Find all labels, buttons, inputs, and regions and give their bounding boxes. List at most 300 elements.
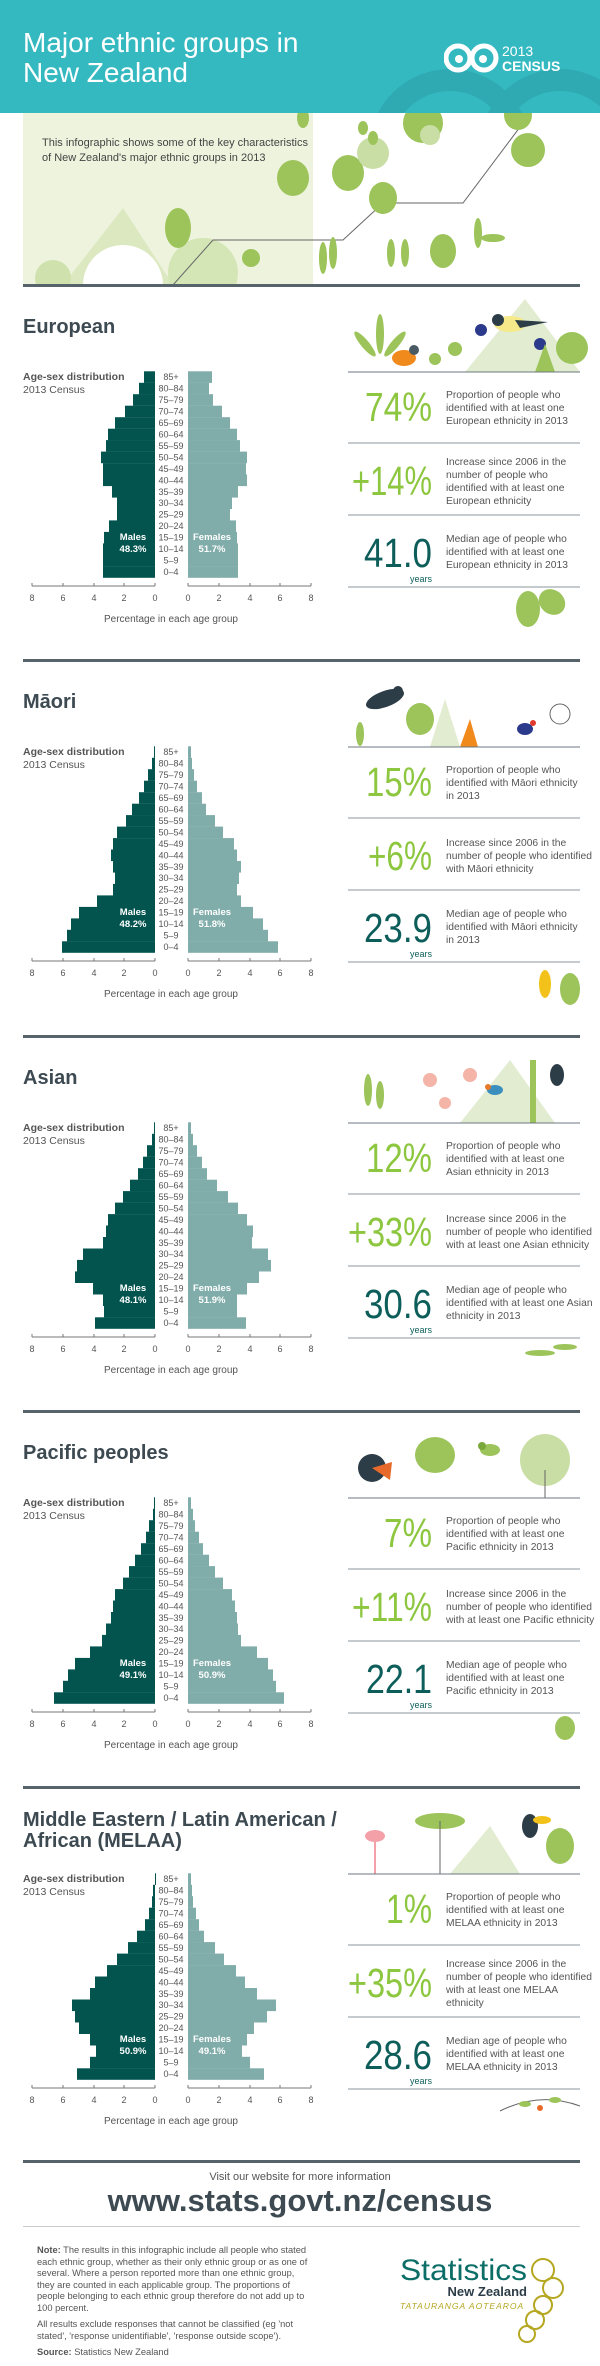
stat: proportion: Proportion of people who <box>446 390 561 401</box>
population pyramid: 80–84 <box>158 758 184 768</box>
chart label <box>23 1497 125 1522</box>
logo: 2013 census: CENSUS <box>502 58 560 74</box>
stat: median age: years <box>410 1700 432 1710</box>
population pyramid: 5–9 <box>163 1307 179 1317</box>
logo: 2013 census: 2013 <box>502 43 533 59</box>
population pyramid: 55–59 <box>158 1567 184 1577</box>
population pyramid: 60–64 <box>158 1555 184 1565</box>
population pyramid: 80–84 <box>158 1886 184 1896</box>
stat: increase: with at least one Asian ethnicity <box>445 1240 590 1251</box>
chart label <box>23 1873 125 1898</box>
population pyramid: 4 <box>91 1719 97 1729</box>
population pyramid: 75–79 <box>158 395 184 405</box>
population pyramid: 65–69 <box>158 418 184 428</box>
population pyramid: 2 <box>216 593 222 603</box>
population pyramid: 50–54 <box>158 452 184 462</box>
stat: median age: Median age of people who <box>446 2036 567 2047</box>
population pyramid: 70–74 <box>158 782 184 792</box>
stat: proportion: identified with at least one <box>446 403 565 414</box>
stat: increase: number of people who identified <box>446 1602 592 1613</box>
population pyramid: 85+ <box>163 1874 179 1884</box>
population pyramid: 75–79 <box>158 770 184 780</box>
stat: increase: +6% <box>368 833 432 879</box>
population pyramid: 45–49 <box>158 839 184 849</box>
population pyramid: 50–54 <box>158 1954 184 1964</box>
stat: proportion: 1% <box>386 1886 432 1932</box>
population pyramid: 49.1% <box>199 2046 226 2057</box>
stat: increase: European ethnicity <box>446 496 532 507</box>
stat: median age: years <box>410 949 432 959</box>
population pyramid: 2 <box>121 968 127 978</box>
population pyramid: 15–19 <box>158 533 184 543</box>
population pyramid: 5–9 <box>163 931 179 941</box>
illustration: vine <box>500 2097 580 2111</box>
stat: increase <box>352 1584 595 1630</box>
population pyramid: 80–84 <box>158 1134 184 1144</box>
population pyramid: 2 <box>216 1344 222 1354</box>
stat: median age: ethnicity in 2013 <box>446 1311 521 1322</box>
population pyramid <box>29 746 314 1000</box>
section: Pacific peoples <box>23 1410 595 1751</box>
stat: proportion: identified with at least one <box>446 1905 565 1916</box>
population pyramid: 48.1% <box>120 1295 147 1306</box>
stat: increase: Increase since 2006 in the <box>446 1589 566 1600</box>
population pyramid: 6 <box>277 1719 283 1729</box>
illustration: grass <box>525 1344 577 1356</box>
population pyramid: 45–49 <box>158 1966 184 1976</box>
logo: Statistics New Zealand <box>400 2254 564 2343</box>
population pyramid: 10–14 <box>158 1295 184 1305</box>
population pyramid: 15–19 <box>158 908 184 918</box>
heading: European <box>23 316 115 338</box>
population pyramid: 0 <box>185 593 191 603</box>
stat: median age: Median age of people who <box>446 1285 567 1296</box>
population pyramid: Males <box>120 907 146 918</box>
population pyramid: 0 <box>152 593 158 603</box>
population pyramid: 80–84 <box>158 384 184 394</box>
stat: median age: years <box>410 1325 432 1335</box>
stat: median age: MELAA ethnicity in 2013 <box>446 2062 558 2073</box>
population pyramid: 60–64 <box>158 1931 184 1941</box>
population pyramid: 50–54 <box>158 1578 184 1588</box>
population pyramid: 40–44 <box>158 1601 184 1611</box>
population pyramid: 0 <box>152 1719 158 1729</box>
population pyramid: 25–29 <box>158 510 184 520</box>
population pyramid: 10–14 <box>158 1670 184 1680</box>
stat: proportion <box>366 1135 565 1181</box>
population pyramid: 50.9% <box>199 1670 226 1681</box>
population pyramid: 0 <box>185 1344 191 1354</box>
population pyramid: 51.9% <box>199 1295 226 1306</box>
population pyramid: 40–44 <box>158 1226 184 1236</box>
section: Asian <box>23 1035 593 1376</box>
stat: increase: number of people who identified <box>446 1227 592 1238</box>
population pyramid: 15–19 <box>158 1284 184 1294</box>
population pyramid: 20–24 <box>158 896 184 906</box>
stat: median age: European ethnicity in 2013 <box>446 560 568 571</box>
population pyramid: 2 <box>216 1719 222 1729</box>
chart label: 2013 Census <box>23 1510 85 1522</box>
chart label: Age-sex distribution <box>23 371 125 383</box>
population pyramid: 50–54 <box>158 1203 184 1213</box>
population pyramid: 25–29 <box>158 885 184 895</box>
title <box>23 27 298 88</box>
population pyramid: 4 <box>247 2095 253 2105</box>
stat: proportion: Asian ethnicity in 2013 <box>446 1167 549 1178</box>
population pyramid: 0–4 <box>163 1693 179 1703</box>
population pyramid: 55–59 <box>158 1192 184 1202</box>
population pyramid: 0–4 <box>163 1318 179 1328</box>
population pyramid: 4 <box>247 968 253 978</box>
population pyramid: 6 <box>277 1344 283 1354</box>
stat: increase: +35% <box>348 1960 432 2006</box>
stat: increase <box>368 833 592 879</box>
population pyramid: 40–44 <box>158 475 184 485</box>
stat: median age: 28.6 <box>364 2032 432 2078</box>
population pyramid: 50–54 <box>158 827 184 837</box>
heading <box>23 1809 337 1852</box>
population pyramid: 60–64 <box>158 1180 184 1190</box>
stat: increase: Increase since 2006 in the <box>446 838 566 849</box>
population pyramid: 10–14 <box>158 544 184 554</box>
illustration: birds and plants <box>348 299 588 372</box>
section: European <box>23 284 588 627</box>
population pyramid: Males <box>120 2034 146 2045</box>
population pyramid: 75–79 <box>158 1897 184 1907</box>
illustration: leaves <box>539 970 580 1005</box>
population pyramid: 0–4 <box>163 2069 179 2079</box>
stat: increase: ethnicity <box>446 1998 485 2009</box>
heading: African (MELAA) <box>23 1830 182 1852</box>
stat: median age: identified with Māori ethnicity <box>446 922 578 933</box>
population pyramid: 60–64 <box>158 429 184 439</box>
population pyramid: 4 <box>91 593 97 603</box>
population pyramid: Females <box>193 2034 231 2045</box>
population pyramid: 20–24 <box>158 1647 184 1657</box>
population pyramid: 45–49 <box>158 1215 184 1225</box>
population pyramid: 25–29 <box>158 1636 184 1646</box>
population pyramid: Percentage in each age group <box>104 1740 238 1751</box>
stat: proportion: Pacific ethnicity in 2013 <box>446 1542 554 1553</box>
footer: notes: Note: The results in this infographic include all people who stated each ethnic group, whether as their only ethnic group or as one of several. Where a person reported more than one ethnic group, they are counted in each applicable group. The proportions of people belonging to each ethnic group therefore do not add up to 100 percent. <box>37 2245 307 2312</box>
population pyramid: Females <box>193 532 231 543</box>
population pyramid: 50.9% <box>120 2046 147 2057</box>
population pyramid <box>29 371 314 625</box>
population pyramid: 25–29 <box>158 1261 184 1271</box>
population pyramid: 0 <box>185 968 191 978</box>
footer: notes <box>37 2245 308 2357</box>
population pyramid: 35–39 <box>158 1613 184 1623</box>
stat: proportion: identified with Māori ethnicity <box>446 778 578 789</box>
population pyramid: 55–59 <box>158 441 184 451</box>
population pyramid: 0 <box>185 2095 191 2105</box>
logo: Statistics New Zealand: New Zealand <box>448 2284 527 2299</box>
stat: median age <box>366 1656 567 1710</box>
header banner <box>0 0 600 113</box>
population pyramid <box>29 1122 314 1376</box>
stat: median age <box>364 1281 593 1335</box>
stat: proportion: Proportion of people who <box>446 1141 561 1152</box>
illustration: birds and trees <box>348 1434 580 1498</box>
stat: increase: Increase since 2006 in the <box>446 1959 566 1970</box>
population pyramid: 0 <box>152 968 158 978</box>
population pyramid <box>29 1873 314 2127</box>
population pyramid: 55–59 <box>158 1943 184 1953</box>
population pyramid <box>29 1497 314 1751</box>
chart label: 2013 Census <box>23 759 85 771</box>
population pyramid: 4 <box>91 2095 97 2105</box>
stat: increase: Increase since 2006 in the <box>446 457 566 468</box>
population pyramid: 30–34 <box>158 873 184 883</box>
population pyramid: 8 <box>308 593 314 603</box>
population pyramid: 20–24 <box>158 1272 184 1282</box>
stat: proportion: 74% <box>365 384 432 430</box>
chart label: Age-sex distribution <box>23 1873 125 1885</box>
population pyramid: 85+ <box>163 1123 179 1133</box>
section: Maori <box>23 659 592 1005</box>
stat: proportion <box>366 759 578 805</box>
population pyramid: 75–79 <box>158 1521 184 1531</box>
stat: proportion <box>365 384 568 430</box>
chart label: Age-sex distribution <box>23 1122 125 1134</box>
population pyramid: 4 <box>91 968 97 978</box>
footer: website call to action: Visit our website for more information <box>209 2171 391 2183</box>
stat: proportion <box>384 1510 565 1556</box>
population pyramid: 10–14 <box>158 2046 184 2056</box>
stat: median age: identified with at least one Asian <box>446 1298 593 1309</box>
population pyramid: 51.8% <box>199 919 226 930</box>
stat: median age: Pacific ethnicity in 2013 <box>446 1686 554 1697</box>
population pyramid: 0–4 <box>163 942 179 952</box>
title: Major ethnic groups in <box>23 27 298 58</box>
population pyramid: 4 <box>247 1344 253 1354</box>
population pyramid: 80–84 <box>158 1510 184 1520</box>
illustration: tui and plants <box>348 685 580 747</box>
heading: Asian <box>23 1067 77 1089</box>
chart label: 2013 Census <box>23 1886 85 1898</box>
population pyramid: 2 <box>121 1344 127 1354</box>
stat: proportion: identified with at least one <box>446 1529 565 1540</box>
population pyramid: 8 <box>308 968 314 978</box>
population pyramid: 65–69 <box>158 1920 184 1930</box>
footer: website call to action: www.stats.govt.nz/census <box>108 2183 492 2218</box>
population pyramid: 8 <box>29 1344 35 1354</box>
population pyramid: 85+ <box>163 1498 179 1508</box>
stat: proportion: Proportion of people who <box>446 765 561 776</box>
chart label: Age-sex distribution <box>23 1497 125 1509</box>
population pyramid: 48.3% <box>120 544 147 555</box>
stat: increase: with Māori ethnicity <box>445 864 534 875</box>
stat: proportion: 7% <box>384 1510 432 1556</box>
population pyramid: 30–34 <box>158 1249 184 1259</box>
footer: notes: All results exclude responses that cannot be classified (eg 'not stated', 'response unidentifiable', 'response outside scope'). <box>37 2319 293 2340</box>
population pyramid: 2 <box>121 593 127 603</box>
population pyramid: Percentage in each age group <box>104 2116 238 2127</box>
stat: proportion: identified with at least one <box>446 1154 565 1165</box>
population pyramid: 6 <box>277 593 283 603</box>
stat: proportion: in 2013 <box>446 791 480 802</box>
stat: median age: Median age of people who <box>446 909 567 920</box>
stat: proportion: MELAA ethnicity in 2013 <box>446 1918 558 1929</box>
population pyramid: 8 <box>308 2095 314 2105</box>
population pyramid: 45–49 <box>158 464 184 474</box>
population pyramid: 35–39 <box>158 862 184 872</box>
population pyramid: 30–34 <box>158 2000 184 2010</box>
population pyramid: 0 <box>152 2095 158 2105</box>
population pyramid: Males <box>120 1658 146 1669</box>
stat: increase: +33% <box>348 1209 432 1255</box>
population pyramid: 8 <box>308 1719 314 1729</box>
population pyramid: Females <box>193 1283 231 1294</box>
stat: increase: identified with at least one <box>446 483 565 494</box>
chart label <box>23 1122 125 1147</box>
illustration: leaves <box>516 584 570 627</box>
population pyramid: 70–74 <box>158 1158 184 1168</box>
population pyramid: 6 <box>60 593 66 603</box>
population pyramid: 65–69 <box>158 1544 184 1554</box>
population pyramid: 4 <box>247 1719 253 1729</box>
stat: median age: identified with at least one <box>446 1673 565 1684</box>
stat: increase <box>352 457 566 507</box>
population pyramid: 6 <box>277 2095 283 2105</box>
population pyramid: 0–4 <box>163 567 179 577</box>
logo: Statistics New Zealand: Statistics <box>400 2254 527 2287</box>
illustration: leaf <box>555 1716 575 1740</box>
population pyramid: Percentage in each age group <box>104 614 238 625</box>
population pyramid: 85+ <box>163 372 179 382</box>
population pyramid: 30–34 <box>158 498 184 508</box>
population pyramid: 5–9 <box>163 2058 179 2068</box>
stat: increase: number of people who <box>446 470 548 481</box>
population pyramid: Percentage in each age group <box>104 1365 238 1376</box>
population pyramid: 15–19 <box>158 2035 184 2045</box>
population pyramid: 75–79 <box>158 1146 184 1156</box>
stat: proportion <box>386 1886 565 1932</box>
population pyramid: 35–39 <box>158 487 184 497</box>
population pyramid: 30–34 <box>158 1624 184 1634</box>
population pyramid: 6 <box>60 1719 66 1729</box>
population pyramid: 70–74 <box>158 1532 184 1542</box>
population pyramid: 0 <box>185 1719 191 1729</box>
stat: increase: with at least one Pacific ethnicity <box>445 1615 595 1626</box>
population pyramid: 40–44 <box>158 850 184 860</box>
population pyramid: 6 <box>277 968 283 978</box>
population pyramid: 6 <box>60 968 66 978</box>
stat: proportion: 15% <box>366 759 432 805</box>
stat: median age: Median age of people who <box>446 534 567 545</box>
population pyramid: 60–64 <box>158 804 184 814</box>
stat: increase: +14% <box>352 458 432 504</box>
population pyramid: 8 <box>29 968 35 978</box>
population pyramid: 2 <box>121 2095 127 2105</box>
stat: median age: identified with at least one <box>446 2049 565 2060</box>
illustration: blossoms and birds <box>348 1060 580 1123</box>
chart label <box>23 371 125 396</box>
population pyramid: 65–69 <box>158 1169 184 1179</box>
stat: median age: identified with at least one <box>446 547 565 558</box>
stat: proportion: Proportion of people who <box>446 1516 561 1527</box>
logo: Statistics New Zealand: TATAURANGA AOTEAROA <box>400 2301 524 2311</box>
population pyramid: 2 <box>216 2095 222 2105</box>
population pyramid: 35–39 <box>158 1238 184 1248</box>
population pyramid: Males <box>120 532 146 543</box>
population pyramid: 35–39 <box>158 1989 184 1999</box>
stat: increase <box>348 1959 592 2009</box>
stat: median age <box>364 530 568 584</box>
heading: Pacific peoples <box>23 1442 169 1464</box>
population pyramid: 6 <box>60 1344 66 1354</box>
population pyramid: 51.7% <box>199 544 226 555</box>
population pyramid: Males <box>120 1283 146 1294</box>
stat: proportion: European ethnicity in 2013 <box>446 416 568 427</box>
stat: median age: 23.9 <box>364 905 432 951</box>
population pyramid: 2 <box>121 1719 127 1729</box>
stat: increase: number of people who identified <box>446 1972 592 1983</box>
chart label: 2013 Census <box>23 1135 85 1147</box>
footer: notes: Source: Statistics New Zealand <box>37 2347 169 2357</box>
stat: median age: 41.0 <box>364 530 432 576</box>
stat: median age: years <box>410 2076 432 2086</box>
population pyramid: 5–9 <box>163 1682 179 1692</box>
stat: increase: number of people who identified <box>446 851 592 862</box>
chart label <box>23 746 125 771</box>
population pyramid: 8 <box>29 1719 35 1729</box>
population pyramid: 70–74 <box>158 1908 184 1918</box>
stat: median age: 30.6 <box>364 1281 432 1327</box>
population pyramid: 20–24 <box>158 521 184 531</box>
population pyramid: Females <box>193 907 231 918</box>
stat: proportion: 12% <box>366 1135 432 1181</box>
stat: median age <box>364 2032 567 2086</box>
stat: increase: Increase since 2006 in the <box>446 1214 566 1225</box>
chart label: Age-sex distribution <box>23 746 125 758</box>
population pyramid: 2 <box>216 968 222 978</box>
section: MELAA <box>23 1786 592 2163</box>
population pyramid: 10–14 <box>158 919 184 929</box>
illustration: intro plants <box>35 113 545 284</box>
population pyramid: 4 <box>91 1344 97 1354</box>
population pyramid: 4 <box>247 593 253 603</box>
stat: increase <box>348 1209 592 1255</box>
stat: increase: +11% <box>352 1584 432 1630</box>
population pyramid: 15–19 <box>158 1659 184 1669</box>
population pyramid: 25–29 <box>158 2012 184 2022</box>
population pyramid: Percentage in each age group <box>104 989 238 1000</box>
population pyramid: 8 <box>29 2095 35 2105</box>
population pyramid: 49.1% <box>120 1670 147 1681</box>
population pyramid: 85+ <box>163 747 179 757</box>
intro panel <box>23 113 313 285</box>
population pyramid: Females <box>193 1658 231 1669</box>
stat: median age: in 2013 <box>446 935 480 946</box>
logo: 2013 census <box>444 43 560 74</box>
population pyramid: 5–9 <box>163 556 179 566</box>
population pyramid: 0 <box>152 1344 158 1354</box>
stat: proportion: Proportion of people who <box>446 1892 561 1903</box>
stat: median age: 22.1 <box>366 1656 432 1702</box>
heading: Māori <box>23 691 76 713</box>
population pyramid: 8 <box>29 593 35 603</box>
population pyramid: 20–24 <box>158 2023 184 2033</box>
population pyramid: 45–49 <box>158 1590 184 1600</box>
population pyramid: 8 <box>308 1344 314 1354</box>
stat: increase: with at least one MELAA <box>445 1985 558 1996</box>
chart label: 2013 Census <box>23 384 85 396</box>
heading: Middle Eastern / Latin American / <box>23 1809 337 1831</box>
population pyramid: 55–59 <box>158 816 184 826</box>
stat: median age: years <box>410 574 432 584</box>
population pyramid: 48.2% <box>120 919 147 930</box>
